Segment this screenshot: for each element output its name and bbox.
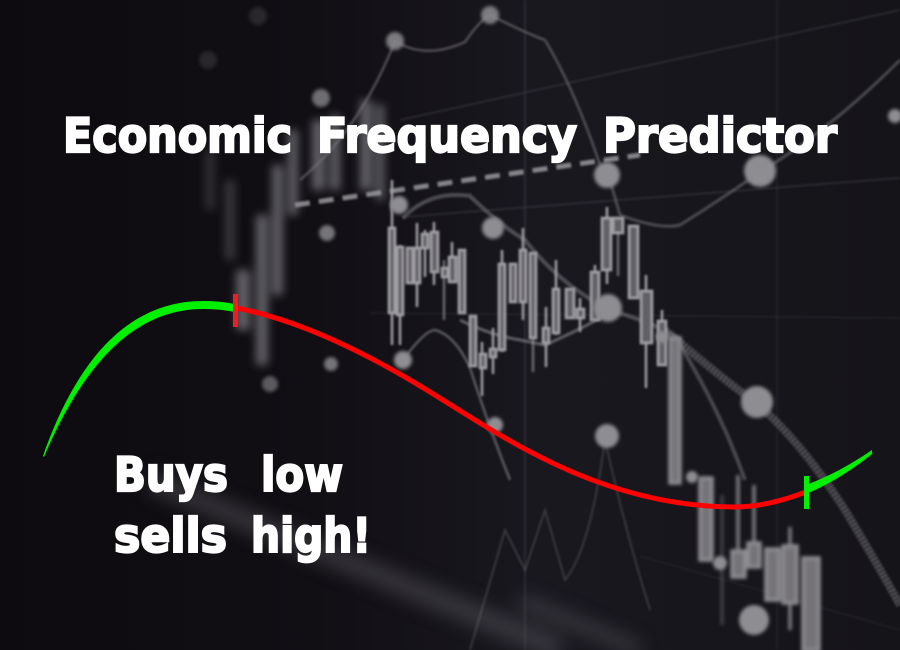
- background: market trend curves: [300, 15, 900, 650]
- frequency curve: [43, 294, 872, 509]
- background: faint bottom diagonal band: [150, 480, 640, 650]
- sell marker: red tick: [233, 294, 238, 327]
- background: candlesticks lower right: [670, 338, 819, 650]
- background: data point dots: [199, 6, 900, 635]
- buy marker: green tick: [804, 476, 809, 509]
- background: dashed trend line: [295, 155, 640, 205]
- slogan: high!: [251, 509, 371, 564]
- slogan: Buys: [114, 448, 228, 503]
- falling segment: red: [236, 308, 806, 507]
- background: thin grid lines: [370, 0, 900, 650]
- title: Predictor: [603, 109, 838, 164]
- slogan: low: [261, 448, 343, 503]
- rising segment: green: [43, 301, 235, 457]
- slogan: [114, 448, 371, 564]
- background: candlesticks: [389, 180, 666, 396]
- title: Frequency: [317, 109, 577, 164]
- title: [63, 109, 838, 164]
- title: Economic: [63, 109, 292, 164]
- slogan: sells: [114, 509, 227, 564]
- background: blurred candlesticks on left: [205, 100, 384, 365]
- rising segment: green right: [806, 450, 872, 494]
